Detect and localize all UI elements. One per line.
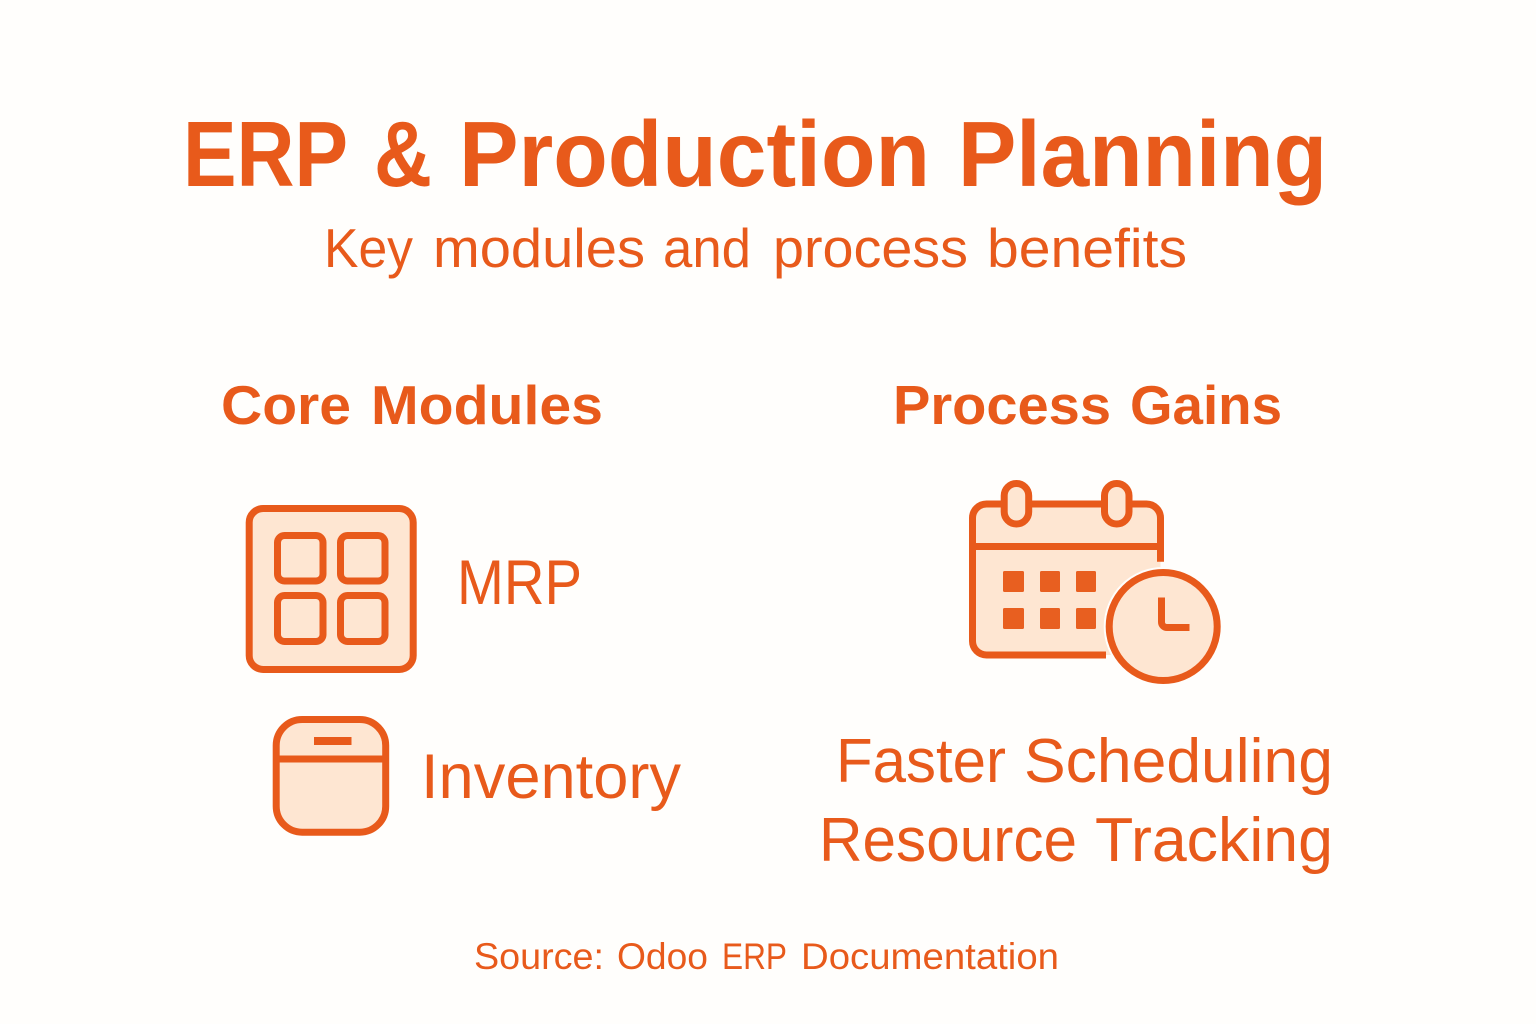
title <box>183 102 1327 206</box>
clock face <box>1109 572 1217 680</box>
label: resource tracking <box>819 806 1333 875</box>
subtitle: benefits <box>987 217 1187 279</box>
panel: core modules <box>221 374 681 832</box>
label: faster scheduling: Scheduling <box>1024 727 1333 796</box>
title: Planning <box>958 102 1327 206</box>
heading: core modules <box>221 374 603 436</box>
calendar day squares <box>1003 571 1096 629</box>
label: faster scheduling <box>836 727 1333 796</box>
source note: Documentation <box>801 936 1059 977</box>
subtitle: process <box>773 217 968 279</box>
subtitle: and <box>663 217 751 279</box>
calendar rings <box>1004 484 1129 524</box>
heading: core modules: Modules <box>371 374 603 436</box>
heading: process gains <box>893 374 1282 436</box>
subtitle: modules <box>433 217 645 279</box>
label: Inventory: Inventory <box>421 742 681 812</box>
heading: process gains: Process <box>893 374 1111 436</box>
panel: process gains <box>819 374 1333 875</box>
heading: core modules: Core <box>221 374 351 436</box>
calendar outline <box>972 504 1160 655</box>
label: faster scheduling: Faster <box>836 727 1006 796</box>
heading: process gains: Gains <box>1130 374 1282 436</box>
subtitle: Key <box>324 217 413 279</box>
calendar header line <box>972 543 1161 550</box>
source note: ERP <box>722 936 787 977</box>
clock halo <box>1104 567 1223 686</box>
clock hands <box>1162 598 1190 628</box>
title: ERP <box>183 102 348 206</box>
icon: calendar with clock <box>972 484 1223 686</box>
calendar fill <box>972 504 1160 655</box>
source note: Odoo <box>617 936 708 977</box>
source note: Source: <box>474 936 604 977</box>
title: & <box>374 102 432 206</box>
subtitle <box>324 217 1187 279</box>
icon: inventory box <box>276 720 386 832</box>
label: MRP: MRP <box>457 548 582 618</box>
label: resource tracking: Resource <box>819 806 1077 875</box>
title: Production <box>459 102 930 206</box>
label: resource tracking: Tracking <box>1095 806 1333 875</box>
source note <box>474 936 1059 977</box>
icon: MRP module grid <box>249 508 413 670</box>
